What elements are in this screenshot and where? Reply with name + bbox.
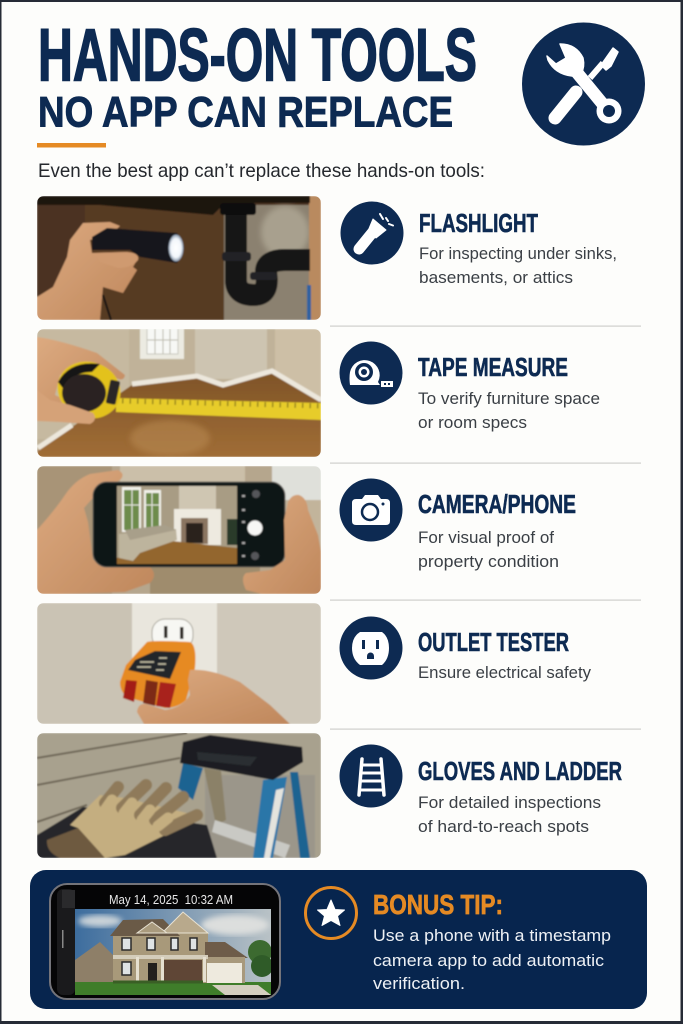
photo: camera phone [37, 466, 321, 594]
item text: outlet tester: Ensure electrical safety [418, 664, 592, 682]
icon: tape measure [340, 342, 402, 404]
icon: star badge [306, 888, 356, 938]
item text: flashlight [419, 210, 617, 287]
item text: camera/phone: CAMERA/PHONE [418, 491, 576, 519]
intro text: Even the best app can’t replace these hands-on tools: [38, 160, 485, 182]
photo: outlet tester [37, 603, 321, 724]
bonus tip text: camera app to add automatic [373, 952, 604, 970]
item text: gloves and ladder: For detailed inspections [418, 794, 601, 812]
panel: bonus tip [30, 870, 647, 1009]
bonus tip text: verification. [373, 975, 465, 993]
photo: flashlight under sink [37, 196, 321, 320]
timestamp phone: May 14, 2025 10:32 AM [109, 893, 233, 907]
item text: tape measure: To verify furniture space [418, 390, 600, 408]
item text: gloves and ladder [418, 758, 622, 836]
item text: flashlight: basements, or attics [419, 269, 573, 287]
item text: flashlight: For inspecting under sinks, [419, 245, 617, 263]
orange accent bar [37, 143, 106, 148]
bonus tip text: Use a phone with a timestamp [373, 927, 611, 945]
title [38, 14, 477, 136]
icon: flashlight [340, 202, 404, 264]
title: NO APP CAN REPLACE [38, 88, 453, 136]
photo: tape measure [37, 329, 321, 457]
item text: tape measure: TAPE MEASURE [418, 354, 568, 382]
item text: flashlight: FLASHLIGHT [419, 210, 538, 238]
bonus tip heading: BONUS TIP: [373, 889, 503, 920]
item text: camera/phone [418, 491, 576, 571]
item text: outlet tester [418, 629, 592, 682]
timestamp phone [50, 884, 280, 999]
icon: outlet [340, 616, 402, 680]
item text: camera/phone: For visual proof of [418, 529, 554, 547]
item text: tape measure [418, 354, 600, 432]
item text: tape measure: or room specs [418, 414, 527, 432]
item text: gloves and ladder: of hard-to-reach spots [418, 818, 589, 836]
bonus tip text [373, 927, 611, 993]
item text: camera/phone: property condition [418, 553, 559, 571]
icon: ladder [340, 744, 402, 808]
icon: camera [340, 478, 402, 542]
photo: gloves and ladder [37, 733, 321, 858]
photo: house [75, 909, 273, 995]
item text: outlet tester: OUTLET TESTER [418, 629, 569, 657]
icon: wrench and screwdriver [522, 22, 645, 146]
